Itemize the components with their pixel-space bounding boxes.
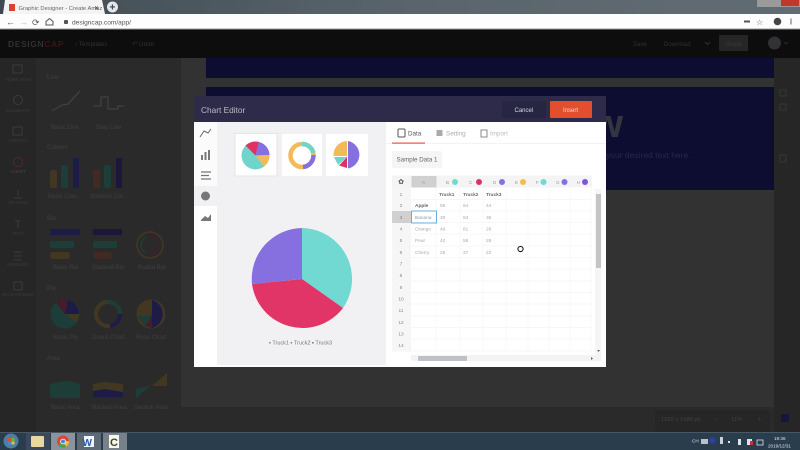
system tray: [692, 436, 791, 448]
app header bar: Save: [633, 42, 647, 48]
spreadsheet row numbers: 11: [399, 308, 404, 314]
chart library panel: Stacked Bar: [92, 265, 125, 271]
spreadsheet row numbers: 5: [400, 238, 403, 244]
app header bar: [0, 30, 800, 58]
spreadsheet data cells: 58: [463, 238, 469, 244]
rose thumbnail: [326, 134, 368, 176]
spreadsheet column headers: H: [577, 180, 580, 185]
left icon rail: TEXT: [12, 231, 24, 236]
insert button: Insert: [563, 108, 578, 114]
spreadsheet data cells: 30: [440, 215, 446, 221]
pie thumbnail selected: [235, 134, 277, 176]
system tray: CH: [692, 438, 699, 444]
horizontal scrollbar: [411, 355, 601, 361]
spreadsheet row numbers: 4: [400, 226, 403, 232]
app header bar: Share: [726, 42, 743, 48]
pie legend: ▪ Truck1 ▪ Truck2 ▪ Truck3: [269, 340, 332, 346]
chart library panel: [47, 75, 169, 411]
spreadsheet row numbers: 8: [400, 273, 403, 279]
browser address bar: ←: [6, 17, 15, 27]
right rail icons: [780, 90, 786, 162]
modal body right: [386, 122, 606, 367]
chart library panel: Stacked Area: [91, 405, 127, 411]
spreadsheet row numbers: 14: [398, 343, 404, 349]
spreadsheet data cells: 58: [440, 203, 446, 209]
browser address bar: designcap.com/app/: [72, 20, 131, 26]
browser tab strip: Graphic Designer - Create Amaz: [18, 6, 102, 12]
spreadsheet data cells: Banana: [415, 215, 432, 221]
bar thumbnails: [50, 229, 163, 259]
start button: [4, 434, 18, 448]
modal body left: [194, 122, 386, 367]
chart library panel: Basic Area: [51, 405, 80, 411]
cancel button: Cancel: [514, 108, 533, 114]
left icon rail: CHART: [10, 169, 26, 174]
left icon rail: UPLOADS: [8, 200, 29, 205]
chart library panel: Line: [47, 75, 59, 81]
spreadsheet column headers: B: [446, 180, 449, 185]
insert button: [550, 101, 592, 118]
left icon rail: T: [15, 219, 22, 231]
spreadsheet data cells: 64: [463, 203, 469, 209]
word icon: W: [82, 438, 92, 449]
browser address bar: →: [19, 17, 28, 27]
spreadsheet row numbers: 10: [398, 296, 404, 302]
sample data button: Sample Data 1: [396, 156, 438, 164]
zoom controls: +: [758, 417, 762, 423]
spreadsheet row numbers: 6: [400, 250, 403, 256]
spreadsheet row numbers: 9: [400, 285, 403, 291]
spreadsheet column headers: D: [493, 180, 497, 185]
spreadsheet data cells: Apple: [415, 203, 429, 209]
browser address bar: ⟳: [32, 18, 40, 28]
chart library panel: Stacked Col...: [90, 194, 128, 200]
chart library panel: Column: [47, 145, 68, 151]
browser address bar: ☆: [756, 18, 763, 27]
spreadsheet row numbers: 12: [398, 320, 404, 326]
chart library panel: Section Area: [134, 405, 169, 411]
zoom controls: 11%: [731, 417, 742, 423]
zoom controls: [655, 410, 789, 432]
chart library panel: Basic Bar: [53, 265, 79, 271]
spreadsheet data cells: Truck2: [463, 192, 479, 198]
chart library panel: Radial Bar: [138, 265, 166, 271]
vertical scrollbar: [595, 189, 601, 355]
sample data button: [392, 151, 442, 168]
zoom controls: –: [714, 417, 718, 423]
spreadsheet row numbers: 1: [400, 192, 403, 198]
spreadsheet data cells: 22: [486, 250, 492, 256]
editor tabs: Setting: [446, 130, 466, 138]
spreadsheet data cells: 81: [463, 226, 469, 232]
system tray: 2019/12/31: [768, 444, 791, 448]
spreadsheet data cells: [415, 192, 502, 256]
spreadsheet row numbers: 7: [400, 262, 403, 268]
chart library panel: Basic Line: [51, 125, 79, 131]
chart library panel: Basic Colu...: [48, 194, 82, 200]
modal header: Chart Editor: [201, 105, 246, 115]
left icon rail: BACKGROUND: [2, 292, 34, 297]
cursor icon: [518, 246, 523, 252]
spreadsheet data cells: 42: [440, 238, 446, 244]
chart library panel: Area: [47, 356, 60, 362]
spreadsheet data cells: 36: [486, 215, 492, 221]
design canvas: your desired text here.: [606, 150, 691, 160]
chart library panel: Step Line: [96, 125, 122, 131]
spreadsheet data cells: 28: [486, 238, 492, 244]
spreadsheet data cells: Pear: [415, 238, 426, 244]
windows taskbar: [0, 432, 800, 450]
cancel button: [502, 101, 546, 118]
area thumbnails: [50, 373, 167, 398]
spreadsheet row numbers: [392, 188, 411, 352]
spreadsheet row numbers: 13: [398, 332, 404, 338]
editor tabs: Data: [408, 130, 422, 138]
left icon rail: [0, 58, 181, 432]
editor tabs: [386, 129, 606, 144]
spreadsheet data cells: 64: [463, 215, 469, 221]
spreadsheet row numbers: 3: [400, 215, 403, 221]
spreadsheet data cells: Truck1: [439, 192, 455, 198]
app header bar: Download: [664, 42, 691, 48]
camtasia icon: [103, 433, 127, 450]
left icon rail: PHOTOS: [9, 138, 27, 143]
word icon: [77, 433, 101, 450]
spreadsheet data cells: 26: [486, 226, 492, 232]
chart editor modal: [194, 96, 606, 367]
left icon rail: TEMPLATES: [5, 77, 31, 82]
browser tab strip: ✕: [94, 6, 99, 12]
app header bar: ‹ Templates: [75, 41, 107, 48]
file explorer icon: [26, 433, 50, 450]
spreadsheet data cells: Cherry: [415, 250, 430, 256]
system tray: 19:36: [774, 436, 786, 441]
pie thumbnails: [50, 299, 166, 328]
editor tabs: Import: [490, 130, 508, 138]
chrome icon: [51, 433, 75, 450]
spreadsheet data cells: 37: [463, 250, 469, 256]
spreadsheet data cells: 44: [486, 203, 492, 209]
main pie chart: [252, 228, 352, 328]
chart library panel: Bar: [47, 216, 56, 222]
chart library panel: Basic Pie: [53, 335, 79, 341]
left icon rail: ELEMENTS: [6, 108, 30, 113]
left icon rail: MODULES: [7, 262, 29, 267]
spreadsheet data cells: 25: [440, 250, 446, 256]
spreadsheet column headers: F: [536, 180, 539, 185]
spreadsheet column headers: G: [556, 180, 560, 185]
spreadsheet data cells: Truck3: [486, 192, 502, 198]
browser tab strip: +: [110, 2, 116, 14]
app header bar: DESIGNCAP: [8, 39, 64, 49]
modal header: [194, 96, 606, 122]
chart library panel: Pie: [47, 286, 56, 292]
spreadsheet column headers: C: [469, 180, 473, 185]
spreadsheet column headers: [392, 176, 592, 188]
app header bar: ↶ Undo: [132, 41, 155, 48]
zoom controls: 1920 x 1080 px: [661, 417, 701, 423]
spreadsheet column headers: E: [515, 180, 518, 185]
donut thumbnail: [282, 134, 322, 176]
camtasia icon: C: [110, 437, 118, 449]
browser address bar: [0, 14, 800, 30]
browser tab strip: [0, 0, 800, 14]
spreadsheet data cells: Orange: [415, 226, 431, 232]
chart type tabs: [194, 122, 217, 221]
chart library panel: Donut Chart: [92, 335, 125, 341]
chart library panel: Rose Chart: [136, 335, 167, 341]
spreadsheet data cells: 49: [440, 226, 446, 232]
design canvas: w: [591, 102, 624, 146]
spreadsheet row numbers: 2: [400, 203, 403, 209]
column thumbnails: [50, 158, 122, 188]
line thumbnails: [52, 91, 124, 111]
spreadsheet column headers: ✿: [398, 179, 404, 186]
design canvas: [181, 58, 800, 432]
selected cell: [412, 211, 436, 223]
spreadsheet column headers: A: [422, 180, 425, 185]
